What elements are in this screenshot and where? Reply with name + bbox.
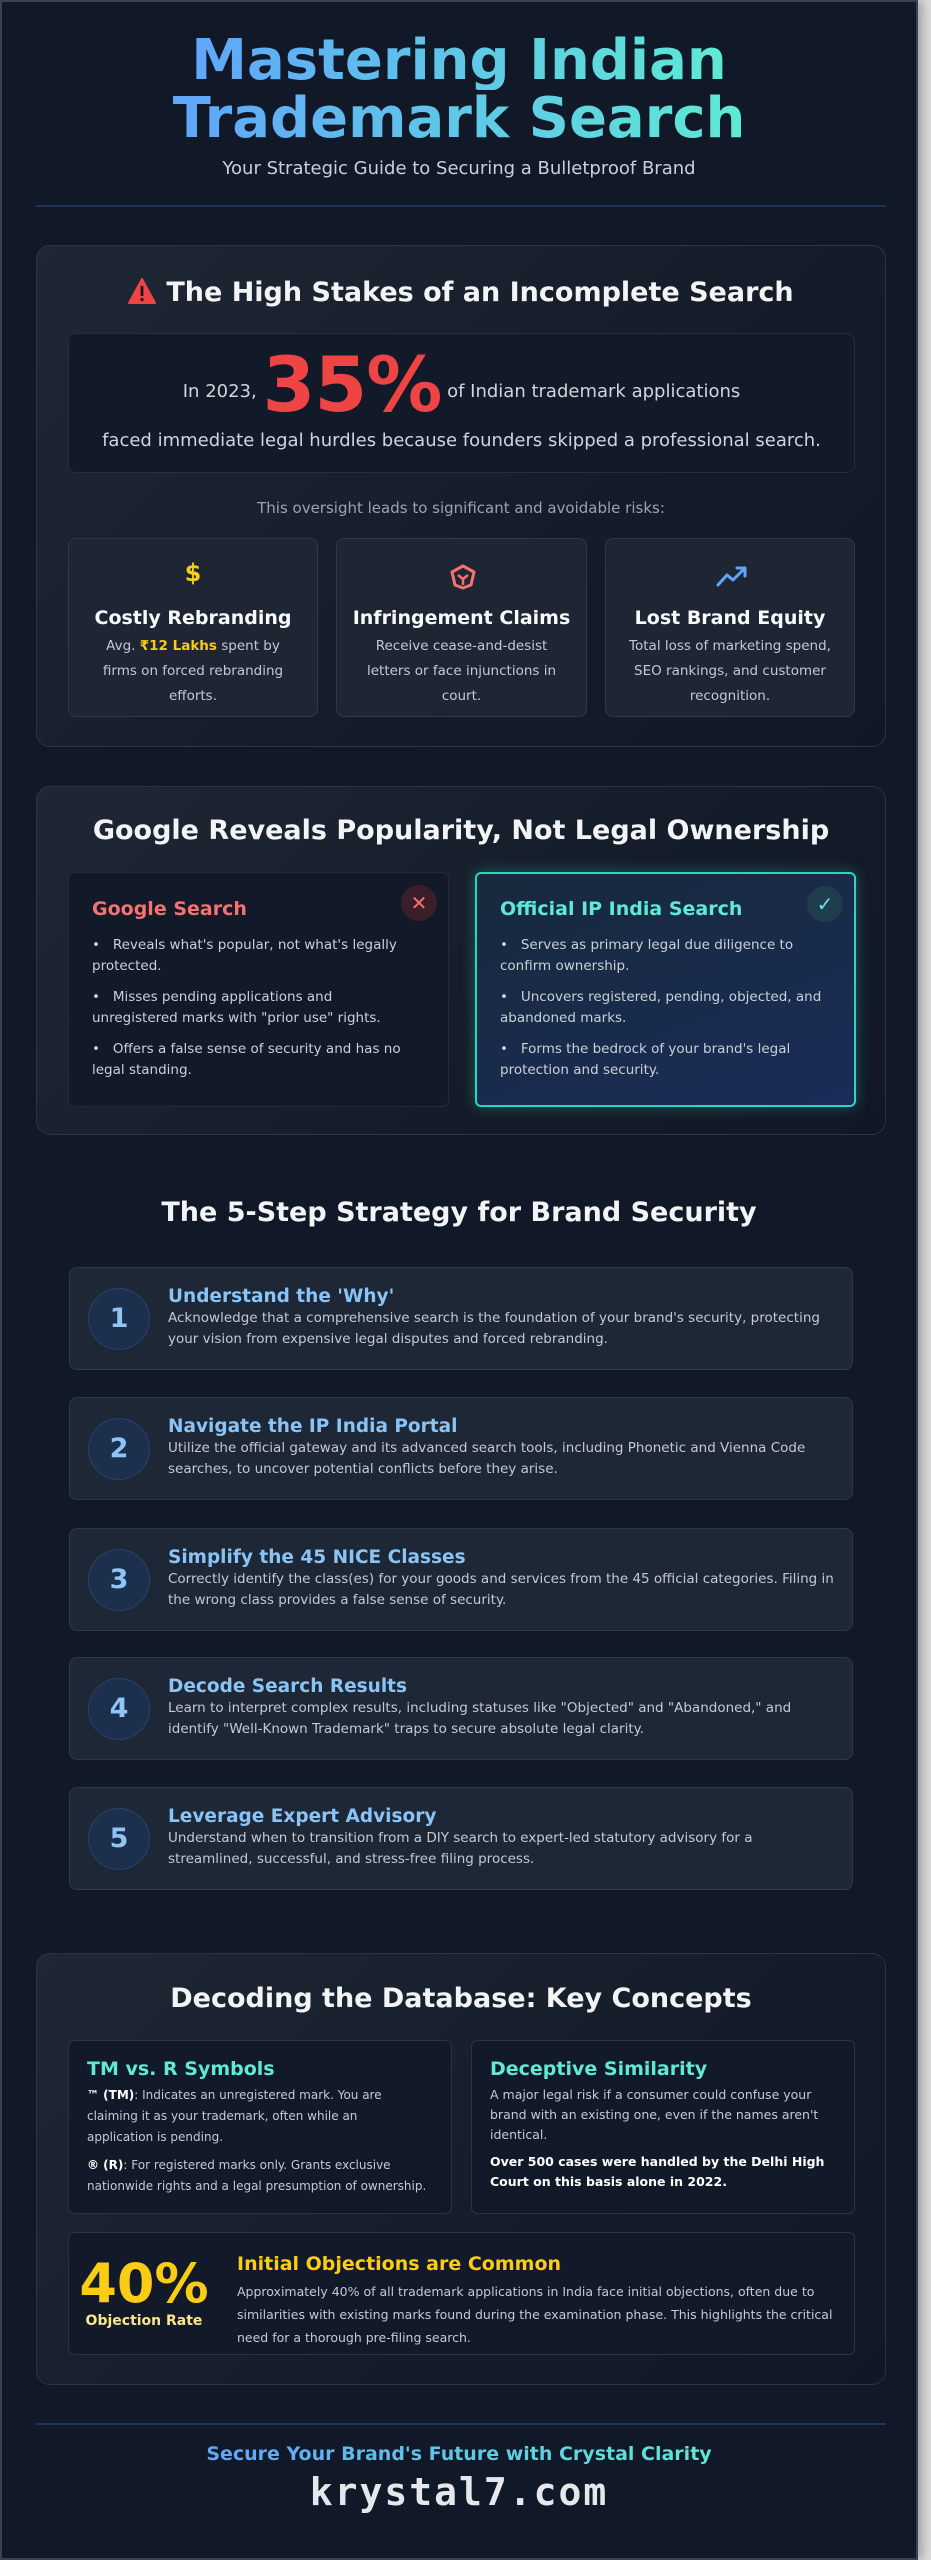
footer site: krystal7.com: [310, 2470, 608, 2514]
card: google search: • Reveals what's popular, not what's legally protected.: [92, 937, 397, 974]
card: tm vs r: TM vs. R Symbols: [87, 2058, 275, 2080]
footer tagline: Secure Your Brand's Future with Crystal Clarity: [206, 2443, 712, 2465]
card: initial objections: [68, 2232, 855, 2355]
card: lost equity: [605, 538, 855, 717]
step 3: Simplify the 45 NICE Classes: [168, 1547, 466, 1568]
icon: x: ✕: [411, 891, 427, 915]
stat: 40%: Objection Rate: [86, 2313, 202, 2329]
card: ip india search: • Uncovers registered, pending, objected, and abandoned marks.: [500, 989, 821, 1026]
heading: 5-step: The 5-Step Strategy for Brand Security: [161, 1197, 757, 1228]
step 5: Leverage Expert Advisory: [168, 1806, 436, 1827]
step 4: Learn to interpret complex results, including statuses like "Objected" and "Abandoned," and identify "Well-Known Trademark" traps to secure absolute legal clarity.: [168, 1700, 791, 1737]
step 5: 5: [110, 1823, 128, 1854]
card: google search: Google Search: [92, 898, 247, 920]
step 2: [69, 1397, 853, 1500]
card: ip india search: Official IP India Search: [500, 898, 742, 920]
icon: dollar: $: [185, 559, 201, 587]
step 5: [69, 1787, 853, 1890]
card: costly rebranding: [68, 538, 318, 717]
stat box: 35%: In 2023, 35% of Indian trademark applications: [183, 340, 740, 429]
step 2: Navigate the IP India Portal: [168, 1416, 457, 1437]
heading: google: Google Reveals Popularity, Not Legal Ownership: [93, 815, 829, 846]
step 3: Correctly identify the class(es) for your goods and services from the 45 official categories. Filing in the wrong class provides a false sense of security.: [168, 1571, 834, 1608]
card: initial objections: Initial Objections are Common: [237, 2253, 561, 2275]
step 1: Acknowledge that a comprehensive search is the foundation of your brand's security, protecting your vision from expensive legal disputes and forced rebranding.: [168, 1310, 820, 1347]
icon: x: [401, 885, 437, 921]
step 1: 1: [110, 1303, 128, 1334]
step 3: [69, 1528, 853, 1631]
title: [173, 28, 745, 151]
card: infringement: Receive cease-and-desist letters or face injunctions in court.: [367, 638, 556, 704]
card: google search: [68, 872, 449, 1107]
card: deceptive similarity: [471, 2040, 855, 2214]
step 4: 4: [110, 1693, 128, 1724]
subtitle: Your Strategic Guide to Securing a Bulletproof Brand: [222, 158, 696, 179]
heading: high stakes: The High Stakes of an Incomplete Search: [166, 277, 794, 308]
title: Trademark Search: [173, 86, 745, 151]
heading: key concepts: Decoding the Database: Key Concepts: [170, 1983, 752, 2014]
card: deceptive similarity: Deceptive Similarity: [490, 2058, 707, 2080]
panel: high stakes: [36, 245, 886, 747]
step 1: [69, 1267, 853, 1370]
icon: check: [807, 886, 843, 922]
card: infringement: [336, 538, 587, 717]
icon: gavel: [450, 564, 476, 590]
card: google search: • Offers a false sense of security and has no legal standing.: [92, 1041, 401, 1078]
icon: trend: [716, 566, 747, 587]
card: ip india search: [475, 872, 856, 1107]
card: ip india search: • Serves as primary legal due diligence to confirm ownership.: [500, 937, 793, 974]
step 2: Utilize the official gateway and its advanced search tools, including Phonetic and Vienna Code searches, to uncover potential conflicts before they arise.: [168, 1440, 805, 1477]
card: ip india search: • Forms the bedrock of your brand's legal protection and security.: [500, 1041, 790, 1078]
card: tm vs r: ® (R): For registered marks only. Grants exclusive nationwide rights and a legal presumption of ownership.: [87, 2158, 426, 2193]
title: Mastering Indian: [191, 28, 727, 93]
icon: check: ✓: [817, 892, 833, 916]
step 2: 2: [110, 1433, 128, 1464]
card: tm vs r: ™ (TM): Indicates an unregistered mark. You are claiming it as your trademark, often while an application is pending.: [87, 2088, 382, 2144]
step 4: Decode Search Results: [168, 1676, 407, 1697]
stat box: 35%: faced immediate legal hurdles because founders skipped a professional search.: [102, 430, 821, 451]
stat box: 35%: [68, 333, 855, 473]
panel: google vs ip india: [36, 786, 886, 1135]
card: costly rebranding: Costly Rebranding: [94, 607, 291, 629]
step 3: 3: [110, 1564, 128, 1595]
step 4: [69, 1657, 853, 1760]
step 5: Understand when to transition from a DIY search to expert-led statutory advisory for a streamlined, successful, and stress-free filing process.: [168, 1830, 752, 1867]
card: lost equity: Total loss of marketing spend, SEO rankings, and customer recognition.: [629, 638, 831, 704]
card: costly rebranding: Avg. ₹12 Lakhs spent by firms on forced rebranding efforts.: [103, 638, 283, 704]
panel: key concepts: [36, 1953, 886, 2385]
card: infringement: Infringement Claims: [353, 607, 570, 629]
icon: warning: [128, 278, 156, 304]
card: tm vs r: [68, 2040, 452, 2214]
card: google search: • Misses pending applications and unregistered marks with "prior use" rights.: [92, 989, 381, 1026]
card: initial objections: Approximately 40% of all trademark applications in India face initial objections, often due to similarities with existing marks found during the examination phase. This highlights the critical need for a thorough pre-filing search.: [237, 2284, 832, 2345]
step 1: Understand the 'Why': [168, 1286, 394, 1307]
stat: 40%: 40%: [79, 2252, 209, 2315]
card: deceptive similarity: A major legal risk if a consumer could confuse your brand with an existing one, even if the names aren't identical. Over 500 cases were handled by the Delhi High Court on this basis alone in 2022.: [490, 2087, 824, 2189]
card: lost equity: Lost Brand Equity: [635, 607, 825, 629]
text: oversight: This oversight leads to significant and avoidable risks:: [257, 499, 665, 517]
